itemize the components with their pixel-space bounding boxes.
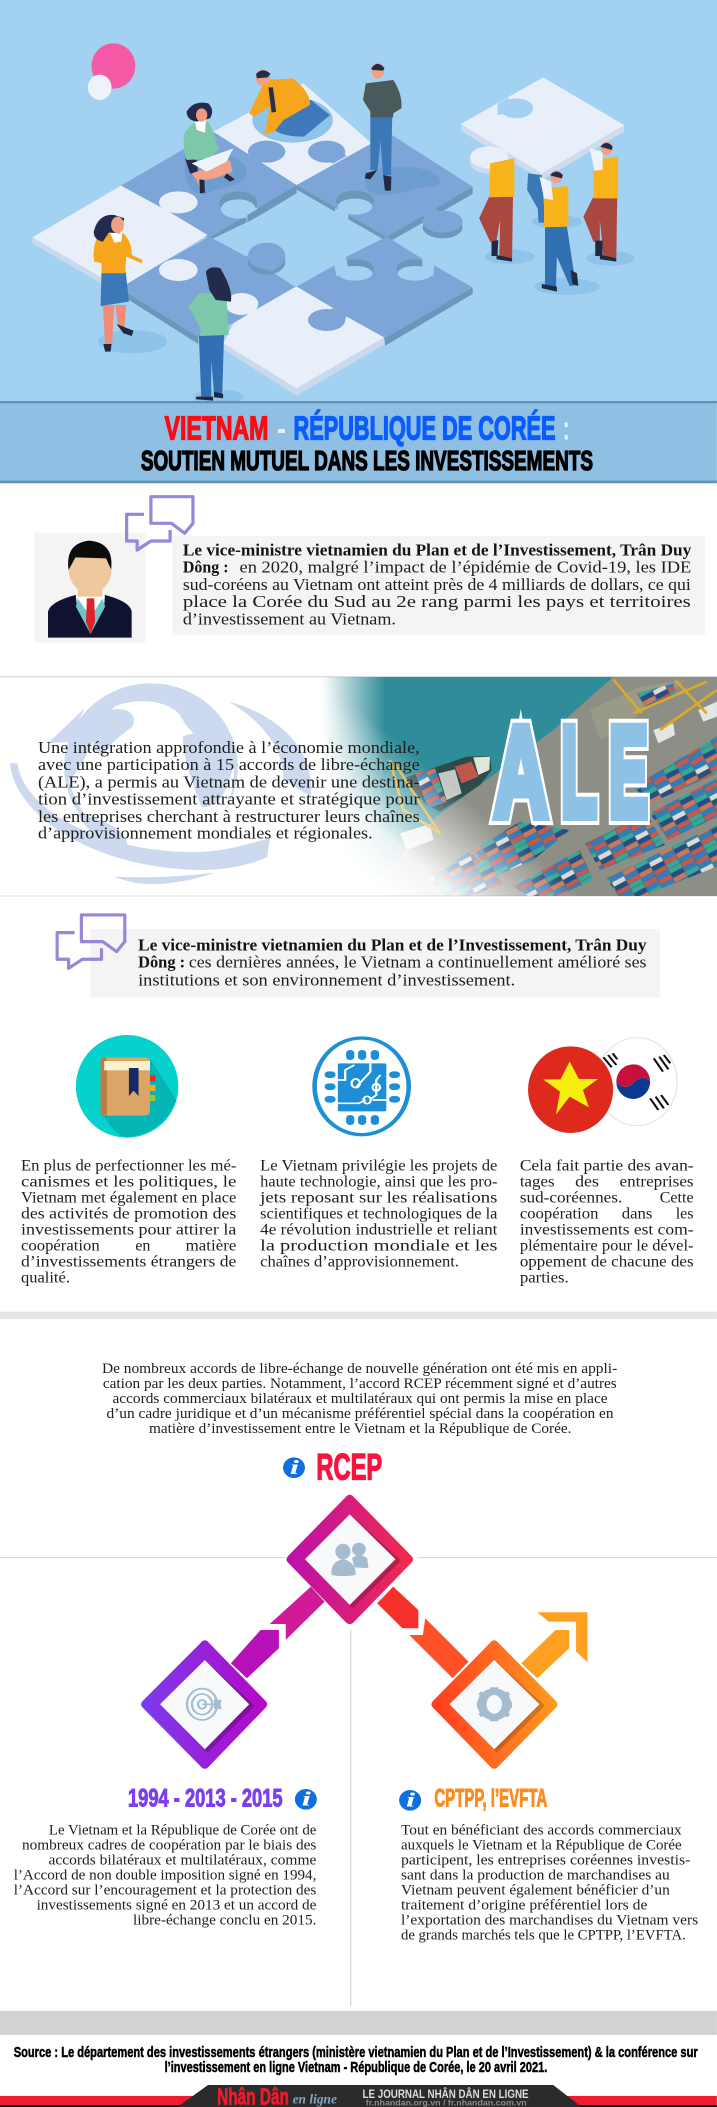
people carrying the piece: [479, 142, 635, 295]
section: agreements diagram: RCEP: [316, 1447, 382, 1488]
intro paragraph: [102, 1360, 617, 1436]
ALE lettering: A: [494, 701, 548, 844]
ALE paragraph: Une intégration approfondie à l’économie mondiale,: [38, 739, 420, 757]
column 3 text: dans: [622, 1205, 652, 1223]
column 3 text: tages: [520, 1173, 555, 1191]
footer logo bar: LE JOURNAL NHÂN DÂN EN LIGNE: [363, 2086, 529, 2101]
column 2 text: Le Vietnam privilégie les projets de: [260, 1157, 497, 1175]
person: woman in green: [188, 267, 244, 404]
section: first quote: [34, 497, 705, 642]
right detail text: traitement d’origine préférentiel lors de: [401, 1896, 648, 1913]
column 1 text: d’investissements étrangers de: [21, 1253, 236, 1271]
person: seated woman with laptop: [184, 103, 235, 193]
icon: circuit chip: [315, 1038, 409, 1135]
second speech bubbles icon: [57, 915, 125, 968]
ALE lettering: L: [561, 701, 597, 844]
footer logo bar: [0, 2084, 717, 2107]
column 1 text: qualité.: [21, 1269, 70, 1287]
column 1 text: [21, 1157, 237, 1287]
column 1 text: des activités de promotion des: [21, 1205, 236, 1223]
port photo: [300, 677, 717, 903]
section: agreements diagram: [0, 1360, 717, 1783]
quote text panel: Dông :: [183, 558, 229, 577]
heading: 1994 - 2013 - 2015: i: [302, 1789, 311, 1811]
heading: CPTPP, l'EVFTA: [399, 1784, 547, 1812]
heading: 1994 - 2013 - 2015: [128, 1784, 317, 1812]
column 2 text: la production mondiale et les: [260, 1237, 497, 1255]
left detail text: l’Accord de non double imposition signé en 1994,: [14, 1866, 316, 1883]
title line 1: [165, 409, 570, 447]
column 1 text: coopération: [21, 1237, 100, 1255]
column 3 text: Cette: [660, 1189, 694, 1207]
heading: RCEP: i: [290, 1457, 299, 1479]
section: ALE free trade agreements: [0, 676, 717, 903]
ALE lettering: L: [561, 701, 597, 844]
title line 1: -: [277, 410, 286, 447]
section: second quote: [57, 915, 660, 997]
column 1 text: canismes et les politiques, le: [21, 1173, 236, 1191]
icon: book: [76, 1035, 178, 1138]
column 1 text: investissements pour attirer la: [21, 1221, 237, 1239]
section: ALE free trade agreements: E: [609, 701, 648, 844]
person: standing man: [363, 63, 402, 191]
second quote text panel: Dông :: [138, 953, 185, 972]
column 2 text: haute technologie, ainsi que les pro-: [260, 1173, 497, 1191]
column 1 text: En plus de perfectionner les mé-: [21, 1157, 236, 1175]
ALE paragraph: (ALE), a permis au Vietnam de devenir une destina-: [38, 773, 420, 792]
portrait panel: [34, 533, 145, 642]
section: ALE free trade agreements: E: [609, 701, 648, 844]
ALE paragraph: avec une participation à 15 accords de libre-échange: [38, 756, 420, 774]
diamond: target: [141, 1640, 267, 1769]
heading: RCEP: [283, 1447, 382, 1488]
second quote text panel: [91, 929, 660, 997]
pink decorative circle: [88, 43, 135, 100]
ALE lettering: [494, 701, 648, 844]
title band: :: [563, 410, 570, 447]
heading: 1994 - 2013 - 2015: 1994 - 2013 - 2015: [128, 1784, 283, 1812]
ALE paragraph: tion d’investissement attrayante et stratégique pour: [38, 790, 420, 809]
person: woman in yellow: [93, 215, 167, 353]
right detail text: [401, 1821, 698, 1943]
section: timelines and details: [0, 1780, 717, 2107]
column 1 text: matière: [186, 1237, 236, 1255]
heading: CPTPP, l'EVFTA: i: [406, 1790, 416, 1812]
quote text panel: [172, 536, 705, 635]
ALE paragraph: d’approvisionnement mondiales et régionales.: [38, 824, 373, 843]
connector arrows: [231, 1587, 588, 1678]
second quote text panel: institutions et son environnement d’investissement.: [138, 971, 515, 989]
ALE lettering: A: [494, 701, 548, 844]
hero illustration: puzzle and team: [0, 0, 717, 404]
column 3 text: [520, 1157, 694, 1287]
column 2 text: [259, 1157, 498, 1271]
ALE paragraph: les entreprises cherchant à restructurer leurs chaînes: [38, 808, 420, 826]
title band: [0, 401, 717, 483]
left detail text: investissements signé en 2013 et un accord de: [37, 1896, 317, 1913]
diamond: gear: [431, 1640, 558, 1769]
icon: Vietnam and Korea flags: [528, 1038, 677, 1133]
left detail text: libre-échange conclu en 2015.: [133, 1911, 316, 1928]
puzzle pieces on the floor: [32, 83, 473, 396]
source note: [14, 2044, 698, 2075]
diamond: RCEP people: [286, 1495, 413, 1624]
column 3 text: sud-coréennes.: [520, 1189, 622, 1207]
intro paragraph: matière d’investissement entre le Vietnam et la République de Corée.: [149, 1420, 572, 1436]
column 3 text: entreprises: [620, 1173, 694, 1191]
column 1 text: en: [135, 1237, 151, 1255]
column 2 text: jets reposant sur les réalisations: [259, 1189, 497, 1207]
ALE paragraph: [38, 739, 420, 843]
column 2 text: chaînes d’approvisionnement.: [260, 1253, 459, 1271]
footer logo bar: en ligne: [293, 2091, 337, 2107]
title line 1: VIETNAM: [165, 410, 268, 447]
column 1 text: Vietnam met également en place: [21, 1189, 236, 1207]
section: timelines and details: CPTPP, l’EVFTA: [434, 1784, 547, 1812]
column 3 text: coopération: [520, 1205, 599, 1223]
left detail text: [14, 1821, 317, 1928]
globe watermark: [10, 683, 311, 884]
column 2 text: 4e révolution industrielle et reliant: [260, 1221, 498, 1239]
person: kneeling man: [249, 69, 333, 143]
left detail text: l’Accord sur l’encouragement et la protection des: [14, 1881, 317, 1898]
left detail text: nombreux cadres de coopération par le biais des: [22, 1836, 317, 1853]
left detail text: Le Vietnam et la République de Corée ont de: [49, 1821, 317, 1838]
column 3 text: des: [575, 1173, 599, 1191]
floating puzzle piece: [461, 77, 624, 180]
speech bubbles icon: [127, 497, 193, 550]
column 3 text: les: [676, 1205, 694, 1223]
column 2 text: scientifiques et technologiques de la: [260, 1205, 498, 1223]
quote text panel: d’investissement au Vietnam.: [183, 610, 396, 628]
column 3 text: parties.: [520, 1269, 569, 1287]
section: three columns: [0, 1035, 717, 1319]
left detail text: accords bilatéraux et multilatéraux, comme: [48, 1851, 317, 1868]
